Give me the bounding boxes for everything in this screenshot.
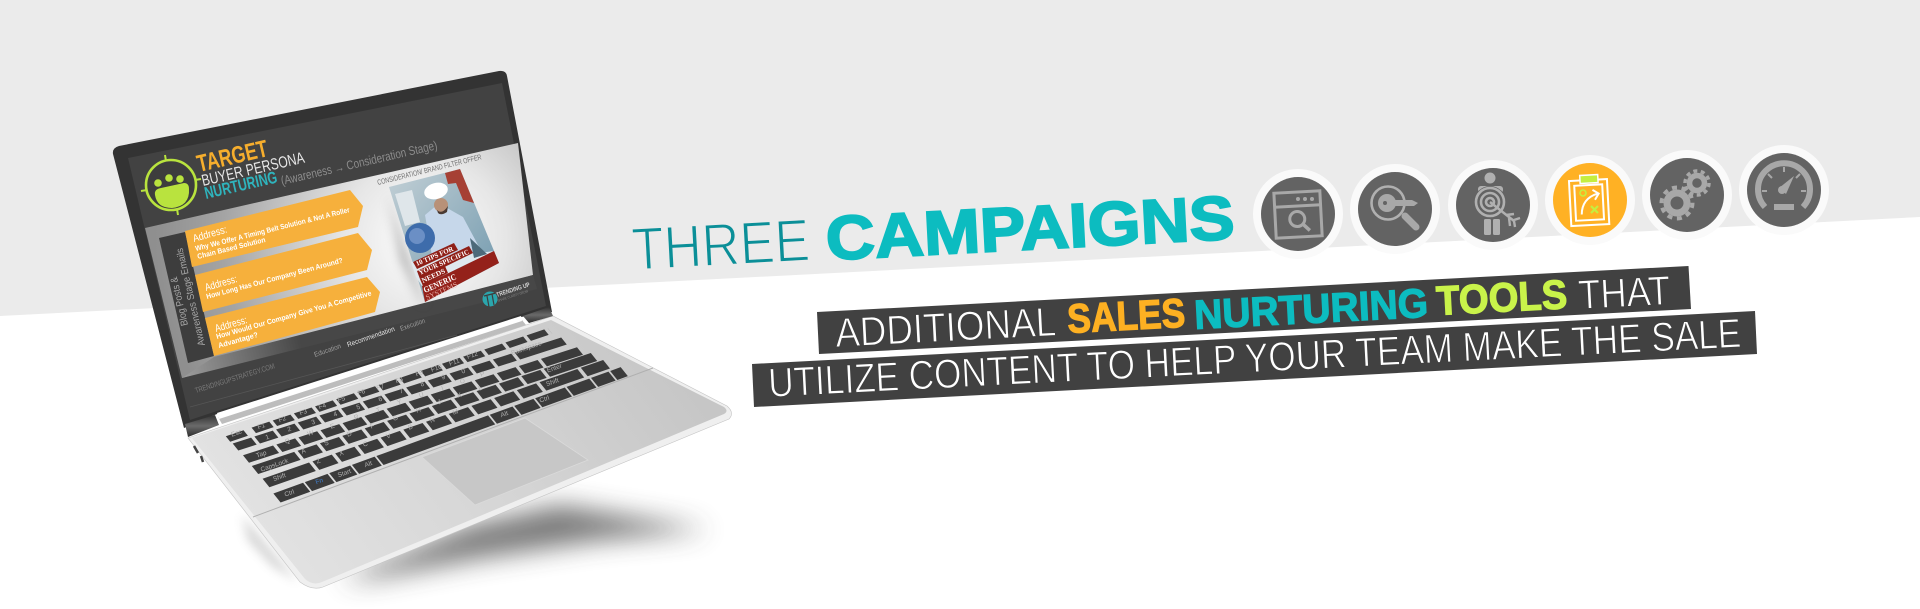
- key labels: R: [353, 413, 360, 422]
- machine: [445, 169, 474, 203]
- silver hinge bar: [218, 320, 526, 424]
- subtitle line 1: TOOLS: [1435, 271, 1568, 324]
- screen url: TRENDINGUPSTRATEGY.COM: [194, 361, 276, 395]
- key labels: CapsLock: [260, 457, 290, 474]
- key labels: Alt: [500, 410, 509, 419]
- key labels: O: [459, 377, 466, 386]
- subtitle line 1: THAT: [1577, 267, 1671, 318]
- ebook cover: YOUR SPECIFIC: [418, 248, 470, 277]
- deck seam: [253, 368, 653, 517]
- key labels: U: [418, 391, 425, 400]
- key labels: F10: [430, 363, 443, 374]
- key labels: [230, 340, 564, 499]
- screen sidebar: Awareness Stage Emails: [175, 247, 208, 347]
- arrow 3: [205, 277, 380, 356]
- key labels: L: [478, 385, 484, 392]
- key labels: 5: [356, 404, 362, 411]
- photo: [389, 169, 499, 302]
- key labels: Alt: [364, 460, 373, 469]
- ebook cover: SYSTEMS: [424, 280, 459, 302]
- grey background band: [0, 0, 1920, 316]
- key labels: E: [329, 422, 336, 431]
- globe: [405, 223, 435, 253]
- key labels: G: [392, 414, 399, 423]
- key labels: F9: [415, 369, 425, 378]
- key labels: V: [385, 432, 392, 441]
- laptop base: [188, 316, 732, 588]
- key labels: P: [479, 371, 486, 379]
- title: CAMPAIGNS: [824, 184, 1236, 274]
- icon: gears: [1642, 150, 1732, 240]
- key labels: Y: [396, 398, 403, 407]
- screen navigation labels: Education: [313, 343, 342, 359]
- arrow 1: Address:: [192, 224, 228, 245]
- arrow 2: [195, 233, 372, 312]
- icon row: [1253, 145, 1829, 259]
- screen sidebar: Blog Posts &: [169, 275, 191, 327]
- arrow 3: Address:: [214, 314, 249, 335]
- lower bezel line: [190, 335, 457, 407]
- arrow 1: [185, 190, 363, 267]
- key labels: S: [323, 439, 330, 448]
- book shadow: [388, 195, 425, 306]
- subtitle line 1: SALES: [1066, 290, 1186, 342]
- helmet: [422, 180, 450, 202]
- key labels: 8: [420, 381, 426, 388]
- key labels: F2: [278, 415, 288, 424]
- left hinge: [185, 415, 219, 437]
- key rows: [228, 331, 626, 498]
- ebook cover: [388, 169, 499, 306]
- subtitle line 1: NURTURING: [1193, 280, 1429, 338]
- shirt: [425, 205, 486, 262]
- key labels: X: [338, 449, 345, 458]
- screen heading: TARGET: [194, 135, 271, 178]
- dark trousers: [470, 238, 487, 258]
- key labels: 7: [399, 388, 405, 395]
- offer caption: CONSIDERATION/ BRAND FILTER OFFER: [376, 152, 483, 187]
- key labels: F11: [448, 357, 461, 368]
- arrow 3: Advantage?: [217, 330, 259, 350]
- key labels: F7: [376, 383, 386, 392]
- ebook cover: GENERIC: [422, 271, 458, 295]
- subtitle line 1: [817, 266, 1691, 356]
- key labels: Backspace: [510, 340, 543, 357]
- key labels: 1: [265, 434, 271, 441]
- key labels: D: [346, 430, 353, 439]
- trending up logo: SHARE CLARITY GROW: [497, 289, 529, 303]
- key labels: 9: [441, 374, 447, 381]
- arrow 2: How Long Has Our Company Been Around?: [205, 256, 344, 301]
- ebook cover: NEEDS: [420, 267, 447, 285]
- key labels: Shift: [272, 472, 287, 483]
- screen heading: [194, 135, 439, 203]
- key labels: B: [407, 424, 414, 432]
- key labels: 0: [461, 368, 467, 375]
- key labels: Ctrl: [284, 488, 296, 499]
- key labels: Shift: [545, 377, 560, 388]
- icon: keyword magnifier: [1350, 164, 1440, 254]
- subtitle line 1: ADDITIONAL: [834, 298, 1057, 356]
- key labels: F: [369, 423, 376, 431]
- screen navigation labels: Recommendation: [346, 326, 396, 349]
- key labels: Fn: [315, 477, 325, 486]
- touchpad: [422, 418, 588, 505]
- key labels: 3: [311, 419, 317, 426]
- key labels: Z: [315, 458, 322, 466]
- icon: browser search: [1253, 169, 1343, 259]
- face: [434, 198, 448, 212]
- icon: speedometer: [1739, 145, 1829, 235]
- key labels: N: [429, 416, 436, 425]
- right hinge: [523, 307, 553, 323]
- key labels: H: [415, 406, 422, 415]
- key labels: 6: [378, 396, 384, 403]
- key labels: F5: [337, 395, 347, 404]
- key labels: 2: [287, 426, 293, 433]
- lower screen gradient band: [182, 275, 537, 378]
- key labels: F3: [299, 408, 309, 417]
- key labels: F1: [257, 422, 267, 431]
- side ports: [194, 446, 203, 462]
- trending up logo: [482, 281, 531, 307]
- laptop: [113, 71, 732, 588]
- white hinge strip: [217, 316, 522, 419]
- key labels: Esc: [230, 428, 243, 439]
- screen navigation labels: Execution: [399, 318, 426, 333]
- key labels: Tap: [255, 449, 268, 460]
- title: [630, 184, 1236, 283]
- key labels: K: [456, 391, 463, 400]
- key labels: F4: [318, 402, 328, 411]
- subtitle line 2: UTILIZE CONTENT TO HELP YOUR TEAM MAKE THE SALE: [767, 310, 1742, 406]
- key labels: Enter: [546, 362, 564, 374]
- screen bezel: [128, 83, 546, 420]
- keyboard deck: [192, 320, 726, 583]
- key labels: A: [300, 447, 307, 456]
- screen heading: (Awareness → Consideration Stage): [280, 138, 439, 188]
- laptop lid: [113, 71, 552, 428]
- keyboard: [228, 331, 626, 499]
- key labels: 4: [333, 411, 339, 418]
- key labels: F8: [395, 376, 405, 385]
- screen content panel: [145, 143, 533, 378]
- table: [411, 251, 494, 286]
- arrow 1: Why We Offer A Timing Belt Solution & Not A Roller: [194, 205, 351, 253]
- screen sidebar: [159, 232, 214, 363]
- trending up logo: TRENDING UP: [495, 281, 531, 299]
- key labels: T: [375, 407, 382, 415]
- icon: persona target: [1448, 160, 1538, 250]
- key labels: Start: [337, 468, 352, 479]
- arrow 1: Chain Based Solution: [196, 235, 267, 261]
- red band: [422, 251, 499, 302]
- key labels: F6: [357, 388, 367, 397]
- screen heading: BUYER PERSONA: [200, 150, 306, 190]
- ebook cover: 10 TIPS FOR: [415, 244, 455, 268]
- key labels: I: [441, 385, 445, 392]
- key labels: W: [306, 429, 315, 438]
- key labels: J: [437, 399, 442, 406]
- arrow 2: Address:: [204, 273, 239, 294]
- key labels: Q: [284, 437, 291, 446]
- key labels: M: [452, 408, 459, 417]
- key labels: Ctrl: [539, 394, 551, 405]
- screen navigation labels: [313, 318, 426, 359]
- arrow 3: How Would Our Company Give You A Competitive: [215, 288, 372, 341]
- title: THREE: [630, 206, 811, 283]
- screen logo: target with people: [141, 155, 201, 215]
- icon: clipboard playbook: [1545, 155, 1635, 245]
- left edge shadow: [242, 515, 298, 582]
- key labels: C: [362, 440, 369, 449]
- screen heading: NURTURING: [203, 168, 279, 203]
- laptop shadow: [340, 505, 710, 580]
- key labels: F12: [466, 350, 479, 361]
